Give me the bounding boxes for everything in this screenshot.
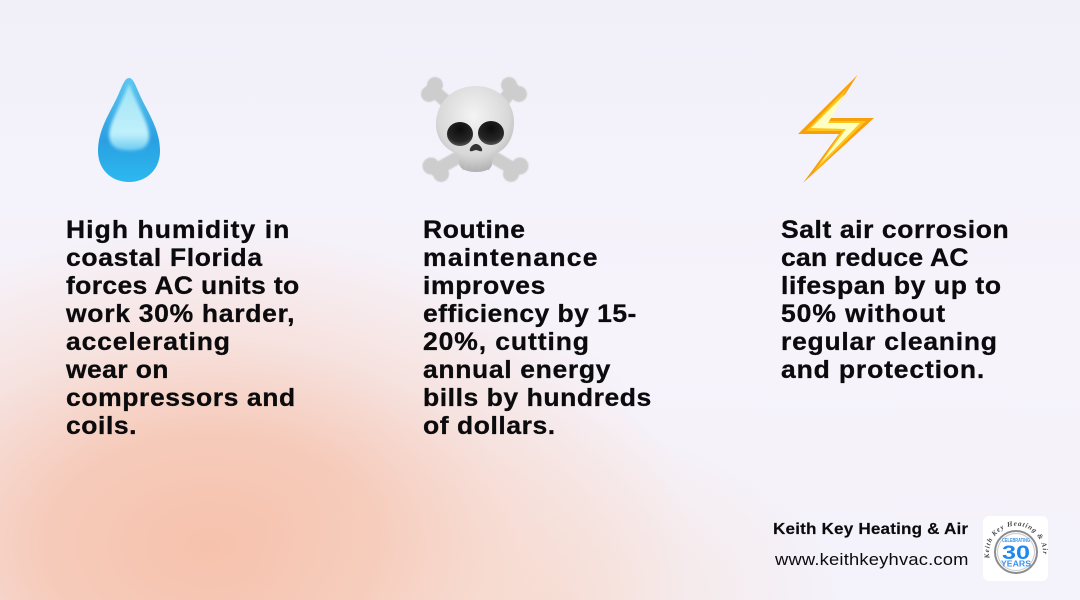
text block: salt air corrosion: 50% without [781,300,946,328]
text block: humidity: coastal Florida [66,244,263,272]
text block: humidity: accelerating [66,328,231,356]
text block: salt air corrosion: regular cleaning [781,328,998,356]
text block: maintenance: Routine [423,216,525,244]
text block: humidity: work 30% harder, [66,300,295,328]
logo badge [983,516,1048,581]
company name: Keith Key Heating & Air [773,521,968,538]
text block: humidity [66,216,300,440]
text block: humidity: compressors and [66,384,296,412]
text block: maintenance: bills by hundreds [423,384,652,412]
logo badge: YEARS [1001,560,1032,568]
text block: maintenance: maintenance [423,244,599,272]
text block: maintenance: of dollars. [423,412,556,440]
text block: salt air corrosion [781,216,1009,384]
text block: salt air corrosion: can reduce AC [781,244,969,272]
logo badge: CELEBRATING [1002,538,1030,544]
text block: salt air corrosion: and protection. [781,356,985,384]
text block: maintenance: annual energy [423,356,611,384]
text block: humidity: High humidity in [66,216,290,244]
text block: humidity: forces AC units to [66,272,300,300]
text block: salt air corrosion: Salt air corrosion [781,216,1009,244]
text block: maintenance: improves [423,272,546,300]
text block: salt air corrosion: lifespan by up to [781,272,1002,300]
text block: humidity: coils. [66,412,137,440]
logo badge: Keith Key Heating & Air [984,521,1048,558]
text block: humidity: wear on [66,356,169,384]
website: www.keithkeyhvac.com [775,550,969,569]
text block: maintenance: 20%, cutting [423,328,590,356]
text block: maintenance: efficiency by 15- [423,300,637,328]
logo badge: 30 [1002,542,1030,564]
text block: maintenance [423,216,652,440]
